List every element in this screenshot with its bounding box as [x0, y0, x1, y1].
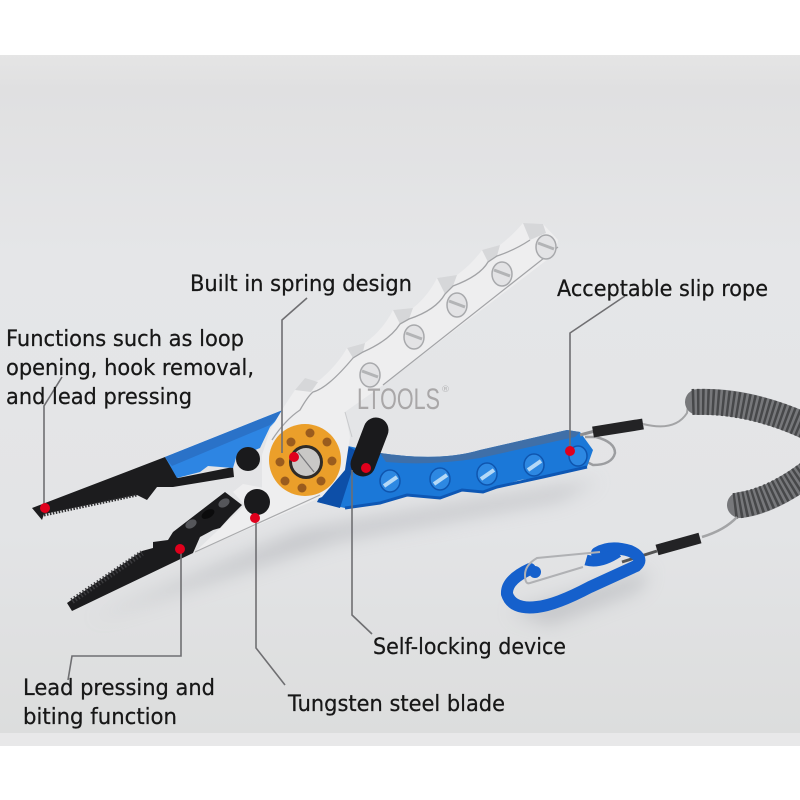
- silver body and handle: [195, 223, 558, 552]
- carabiner gate: [525, 552, 600, 583]
- label: lead pressing: [23, 676, 215, 730]
- self-locking lever: [363, 430, 376, 464]
- watermark: ®: [441, 385, 450, 395]
- lower handle: blue: [317, 430, 593, 508]
- label: functions: Functions such as loop: [6, 327, 244, 352]
- label: self-locking: Self-locking device: [373, 635, 566, 660]
- steel ring behind handle: [577, 437, 615, 465]
- jaw pivot screws: [233, 447, 270, 515]
- red callout dots: [40, 446, 575, 554]
- label: tungsten: Tungsten steel blade: [287, 692, 505, 717]
- coiled cord: [698, 402, 800, 428]
- callout lines: [44, 296, 625, 685]
- soft shadows under the tool: [90, 480, 650, 625]
- slip rope: [507, 402, 800, 607]
- upper jaw: [32, 408, 288, 520]
- label: functions: [6, 327, 254, 410]
- pliers: [32, 223, 615, 611]
- lower sleeve and wire: [702, 517, 737, 537]
- watermark: LTOOLS: [357, 383, 440, 416]
- carabiner: [507, 548, 639, 607]
- pivot: orange ring: [269, 424, 341, 496]
- label: lead pressing: biting function: [23, 705, 177, 730]
- label: slip rope: Acceptable slip rope: [557, 277, 768, 302]
- lower jaw: [67, 492, 242, 611]
- label: spring: Built in spring design: [190, 272, 412, 297]
- label: lead pressing: Lead pressing and: [23, 676, 215, 701]
- label: functions: opening, hook removal,: [6, 356, 254, 381]
- upper sleeve and wire: [580, 431, 595, 435]
- label: functions: and lead pressing: [6, 385, 192, 410]
